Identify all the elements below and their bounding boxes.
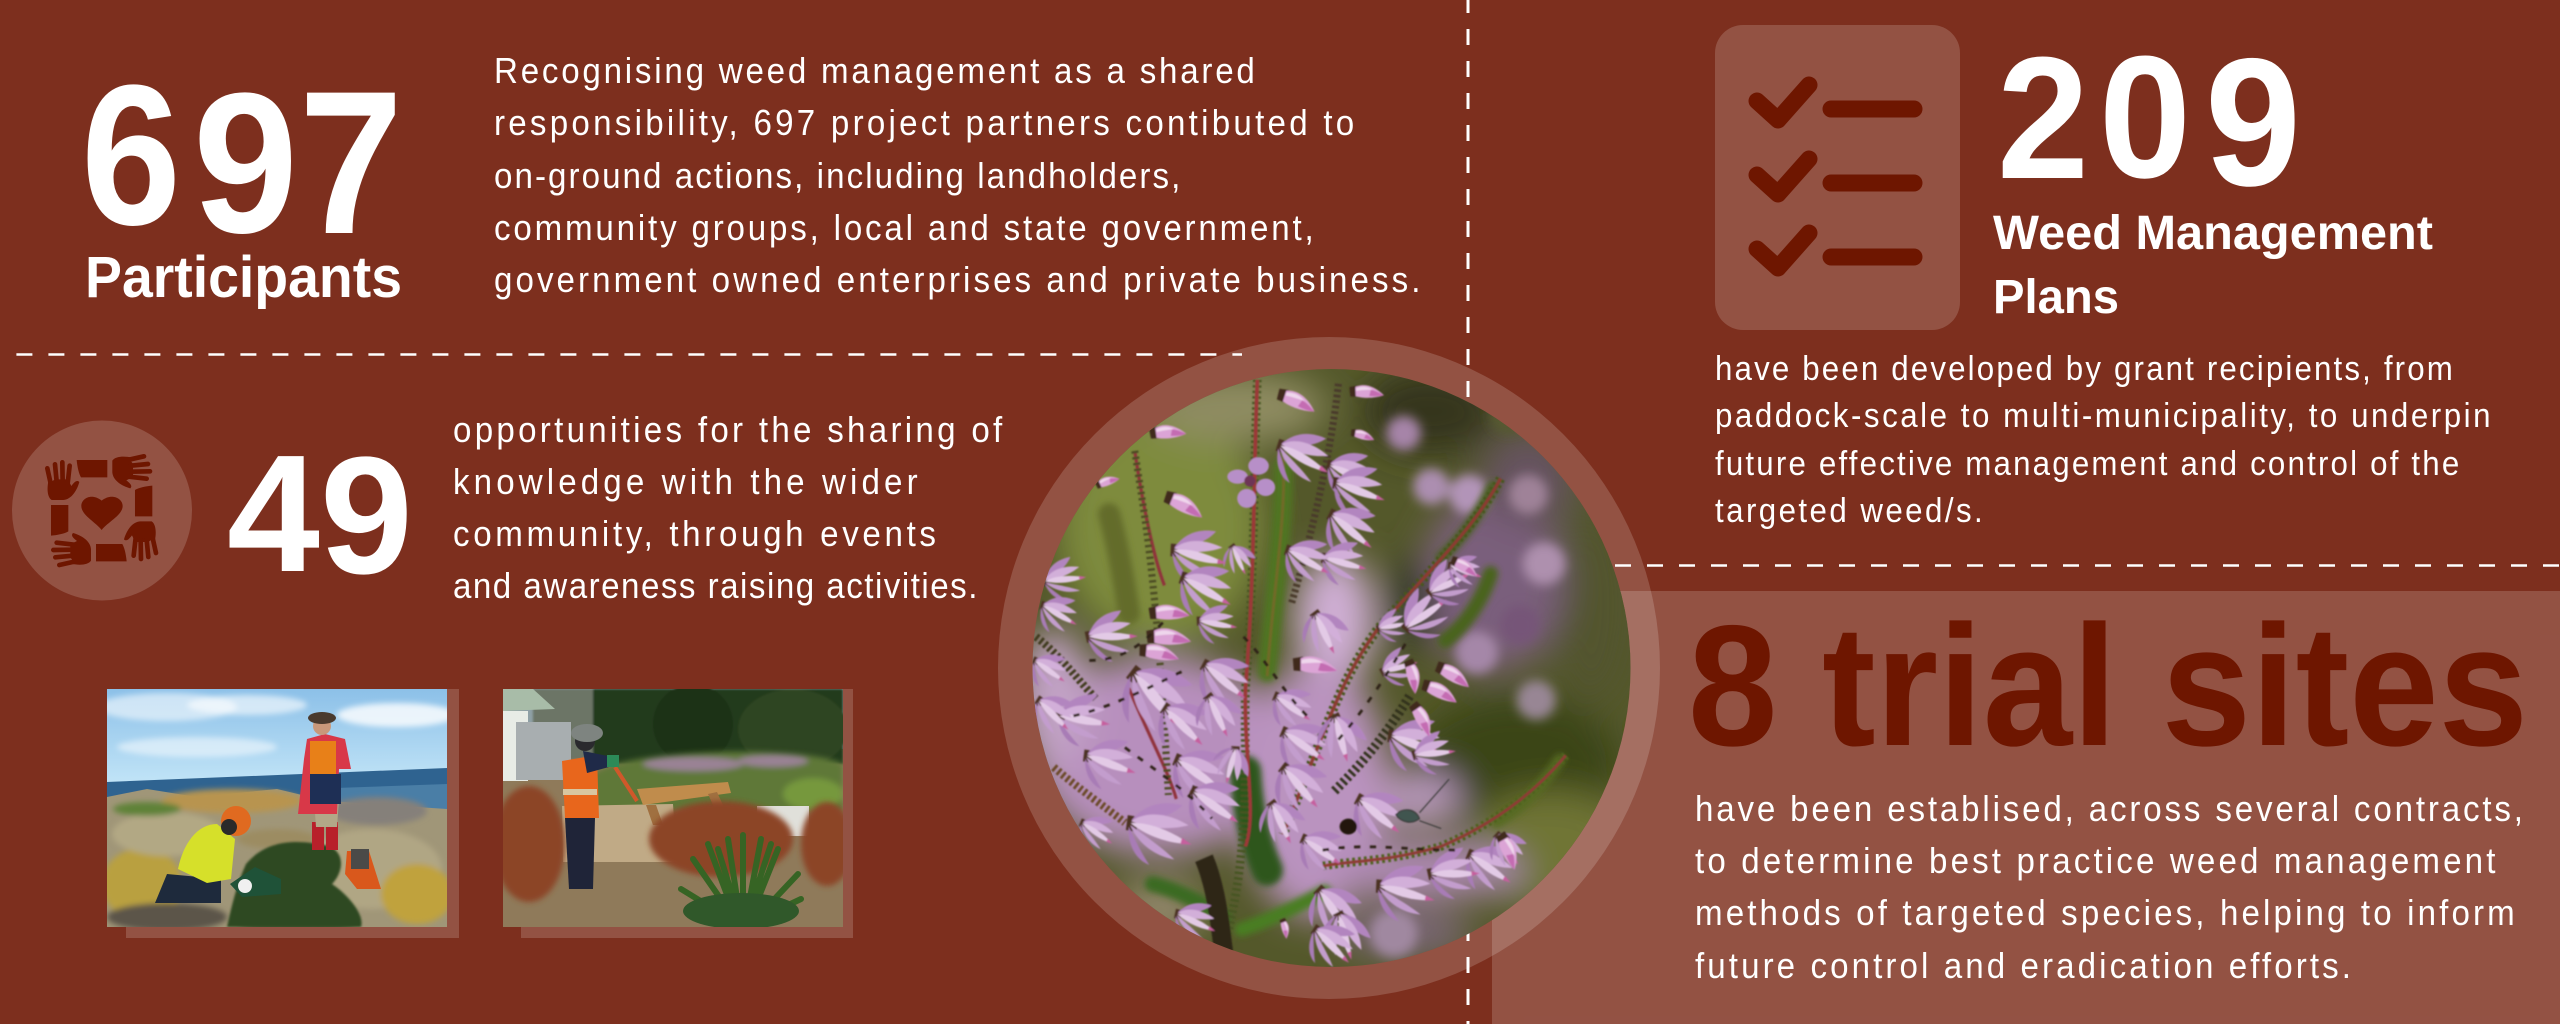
stat: 697 participants: [81, 44, 403, 310]
insect: [1396, 779, 1449, 829]
photo: coastal weed workers: [97, 689, 459, 938]
chainsaw: [345, 851, 381, 889]
stat: 209: 2: [1997, 20, 2089, 215]
text block: opportunities description: knowledge with the wider: [453, 463, 918, 502]
green grass clump: [681, 835, 801, 924]
divider: left horizontal: [16, 353, 1242, 356]
open bell flower: [1227, 457, 1275, 508]
text block: participants description: community groups, local and state government,: [494, 209, 1314, 248]
bush: [227, 842, 362, 927]
photo: heather flowers in circle: [1032, 369, 1630, 967]
stat: 49 opportunities: 4: [227, 421, 320, 607]
standing worker: [298, 712, 351, 850]
text block: opportunities description: [453, 411, 1003, 606]
icon: hands around a heart: [12, 420, 192, 600]
text block: opportunities description: community, through events: [453, 515, 936, 554]
text block: participants description: [494, 52, 1420, 300]
worker with spray: [562, 724, 637, 889]
flower clusters: [1022, 384, 1534, 980]
stat: 209: 0: [2099, 19, 2191, 214]
text block: opportunities description: and awareness raising activities.: [453, 567, 977, 606]
text block: participants description: on-ground actions, including landholders,: [494, 157, 1180, 196]
heading: Weed Management Plans: Plans: [1993, 271, 2119, 324]
text block: plans description: future effective management and control of the: [1715, 444, 2459, 482]
text block: participants description: Recognising weed management as a shared: [494, 52, 1255, 91]
divider: vertical: [1466, 0, 1470, 1024]
text block: trial sites description: to determine best practice weed management: [1695, 842, 2496, 881]
kneeling worker: [155, 806, 281, 903]
photo ring: [998, 337, 1660, 999]
number 697: 6: [81, 44, 181, 267]
text block: trial sites description: future control and eradication efforts.: [1695, 947, 2351, 986]
text block: participants description: government owned enterprises and private business.: [494, 261, 1420, 300]
text block: trial sites description: methods of targeted species, helping to inform: [1695, 894, 2515, 933]
text block: plans description: paddock-scale to multi-municipality, to underpin: [1715, 396, 2491, 434]
stat: 209: 9: [2205, 20, 2301, 224]
text block: plans description: targeted weed/s.: [1715, 491, 1983, 529]
text block: trial sites description: have been establised, across several contracts,: [1695, 790, 2523, 829]
stat: 49 opportunities: 9: [320, 423, 413, 609]
dark flecks: [1073, 621, 1461, 850]
heading: 8 trial sites: 8 trial sites: [1688, 590, 2528, 782]
soft foliage masses: [1109, 467, 1560, 929]
photo: garden weed worker: [493, 684, 853, 938]
number 697: 7: [299, 49, 403, 277]
heading: Weed Management Plans: [1993, 207, 2433, 324]
divider: right horizontal: [1615, 564, 2560, 567]
number 697: [81, 44, 403, 277]
stems: [1036, 380, 1566, 953]
text block: trial sites description: [1695, 790, 2523, 986]
panel: trial sites: [1492, 591, 2560, 1024]
text block: plans description: [1715, 349, 2491, 529]
icon: checklist: [1715, 25, 1960, 330]
stat: 49 opportunities: [227, 421, 413, 609]
number 697: 9: [193, 52, 298, 275]
label Participants: Participants: [85, 245, 402, 310]
text block: plans description: have been developed by grant recipients, from: [1715, 349, 2453, 387]
picnic bench: [637, 782, 731, 825]
text block: opportunities description: opportunities for the sharing of: [453, 411, 1003, 450]
red shrubs: [493, 786, 853, 902]
heading: Weed Management Plans: Weed Management: [1993, 207, 2433, 260]
text block: participants description: responsibility, 697 project partners contibuted to: [494, 104, 1354, 143]
stat: 209: [1997, 19, 2301, 224]
